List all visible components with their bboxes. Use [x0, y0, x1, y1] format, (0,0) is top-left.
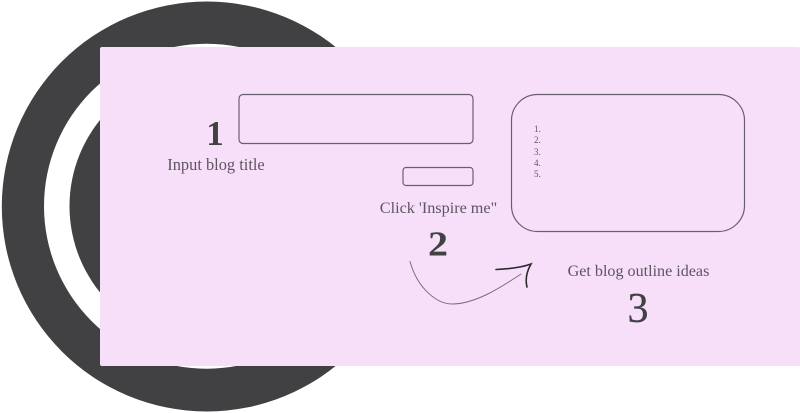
step 3: get blog outline ideas: [512, 94, 744, 332]
step 1: input blog title: [167, 94, 473, 174]
input box: [239, 94, 473, 144]
numbered list: [534, 124, 541, 179]
numbered list: 1.: [534, 124, 541, 134]
numbered list: 5.: [534, 169, 541, 179]
label: click inspire me: Click 'Inspire me": [380, 199, 497, 217]
arrow: curved to results: [410, 262, 531, 304]
background ring logo: [2, 2, 412, 412]
numbered list: 3.: [534, 147, 541, 157]
label: get blog outline ideas: Get blog outline ideas: [568, 263, 709, 280]
output box: [512, 94, 744, 232]
numbered list: 4.: [534, 158, 541, 168]
panel: pink steps background: [100, 47, 800, 366]
number 1: 1: [206, 114, 224, 153]
number 2: 2: [428, 224, 448, 264]
label: input blog title: Input blog title: [167, 155, 265, 174]
number 3: 3: [628, 286, 648, 332]
numbered list: 2.: [534, 135, 541, 145]
button: [403, 168, 473, 186]
step 2: click inspire me: [380, 168, 497, 264]
